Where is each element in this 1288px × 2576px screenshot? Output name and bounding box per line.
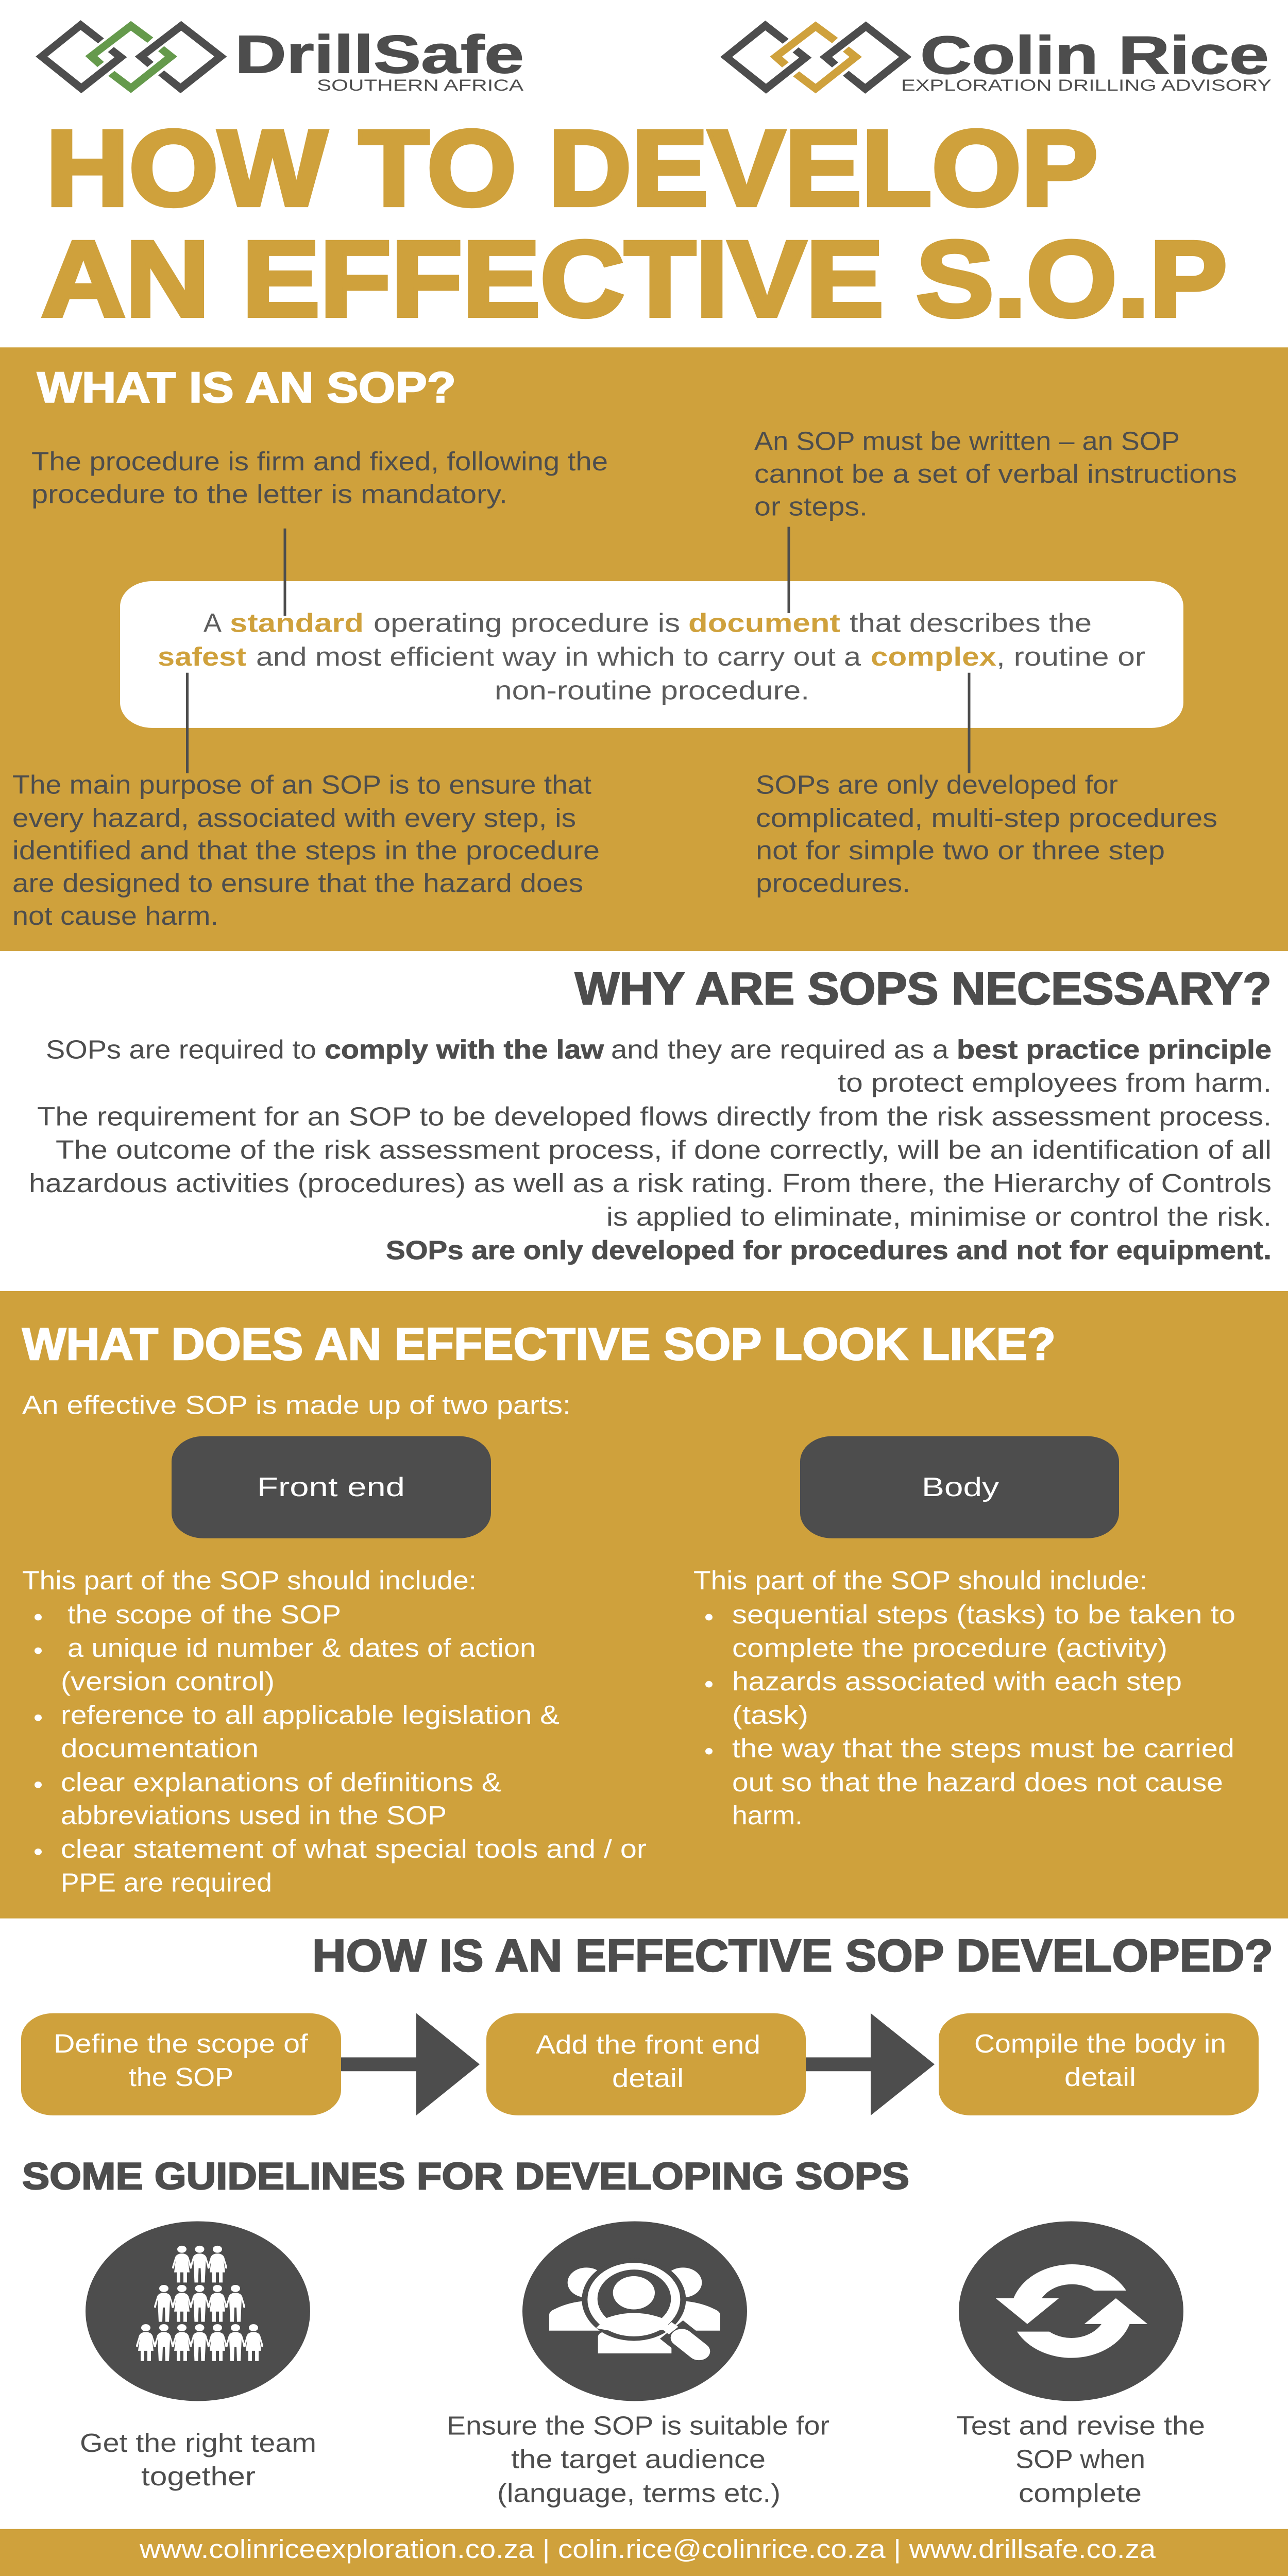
definition box: , routine or [996,642,1145,672]
caption: right team: Get the right team [80,2429,316,2458]
logo: Colin Rice Exploration Drilling Advisory [720,21,1272,94]
icon: DrillSafe interlocking diamonds [36,20,227,93]
definition box: document [688,609,840,638]
step: define scope: Define the scope of [54,2029,309,2058]
caption: test and revise: SOP when [1015,2445,1145,2474]
caption: right team: together [141,2462,256,2491]
box: front end [172,1436,491,1538]
box: front end: Front end [257,1472,405,1502]
caption: right team [80,2429,316,2491]
list: front end contents: PPE are required [61,1868,272,1897]
text: firm and fixed [31,447,608,509]
list: front end contents: abbreviations used in the SOP [61,1801,447,1831]
definition box: complex [871,642,996,672]
list: front end contents: clear statement of what special tools and / or [61,1835,647,1864]
list: body contents: harm. [732,1801,803,1831]
icon: team pyramid [86,2221,310,2401]
body text [29,1036,1272,1265]
list: body contents: (task) [732,1701,808,1730]
caption: suitable for audience [447,2412,829,2508]
panel background [0,347,1288,951]
caption: test and revise: complete [1019,2479,1142,2508]
list: front end contents: (version control) [61,1667,275,1696]
box: body: Body [922,1472,999,1502]
footer: www.colinriceexploration.co.za | colin.rice@colinrice.co.za | www.drillsafe.co.za [139,2535,1156,2564]
box: body [800,1436,1119,1538]
heading: WHAT DOES AN EFFECTIVE SOP LOOK LIKE? [22,1319,1056,1370]
list: front end contents [22,1566,647,1897]
step: compile body: Compile the body in [974,2029,1226,2058]
footer [0,2529,1288,2576]
icon: Colin Rice interlocking diamonds [720,21,911,94]
step: add front end: detail [612,2064,684,2093]
caption: suitable for audience: (language, terms etc.) [497,2479,781,2508]
definition box: and most efficient way in which to carry out a [256,642,861,672]
panel: what does an effective SOP look like [0,1291,1288,1919]
text: must be written: or steps. [754,492,868,521]
definition box: A [204,609,222,638]
panel: how is an effective SOP developed [21,1930,1273,2115]
text: main purpose: The main purpose of an SOP is to ensure that [12,771,591,800]
intro text: An effective SOP is made up of two parts: [22,1391,571,1420]
list: body contents: complete the procedure (activity) [732,1634,1167,1663]
heading: SOME GUIDELINES FOR DEVELOPING SOPS [22,2155,909,2197]
list: body contents: This part of the SOP should include: [693,1566,1147,1595]
list: front end contents: This part of the SOP should include: [22,1566,477,1595]
DrillSafe tagline: SOUTHERN AFRICA [317,76,523,94]
list: body contents [693,1566,1235,1831]
text: only for complicated procedures: not for simple two or three step [756,836,1165,866]
caption: suitable for audience: the target audience [511,2445,766,2474]
list: body contents: out so that the hazard does not cause [732,1768,1223,1797]
text: main purpose [12,771,600,931]
caption: test and revise [956,2412,1205,2508]
list: front end contents: reference to all applicable legislation & [61,1701,560,1730]
panel: what is an SOP [0,347,1288,951]
text: firm and fixed: The procedure is firm and fixed, following the [31,447,608,476]
connector lines [188,527,969,773]
icon: revise cycle arrows [959,2221,1183,2401]
definition box: standard [230,609,364,638]
step: define scope [21,2013,341,2115]
panel: why are SOPs necessary [29,963,1272,1265]
arrow: step 1 to step 2 [341,2013,480,2115]
definition box: operating procedure is [374,609,680,638]
definition box [120,581,1183,728]
text: only for complicated procedures: procedures. [756,869,910,898]
list: body contents: the way that the steps must be carried [732,1734,1234,1763]
Colin Rice tagline: EXPLORATION DRILLING ADVISORY [901,76,1272,94]
text: only for complicated procedures [756,771,1217,898]
caption: suitable for audience: Ensure the SOP is suitable for [447,2412,829,2441]
body text: comply with the law [325,1036,604,1064]
body text: and they are required as a [611,1036,949,1064]
icon: people under magnifying glass [522,2221,747,2401]
logo: DrillSafe Southern Africa [36,20,524,94]
Colin Rice wordmark: Colin Rice [920,26,1269,86]
text: must be written [754,427,1237,521]
text: main purpose: identified and that the steps in the procedure [12,836,600,866]
text: firm and fixed: procedure to the letter is mandatory. [31,480,507,509]
panel background [0,1291,1288,1919]
definition box: that describes the [850,609,1092,638]
list: front end contents: a unique id number & dates of action [67,1634,536,1663]
list: front end contents: the scope of the SOP [67,1600,341,1629]
definition box: non-routine procedure. [495,676,809,705]
definition box: safest [158,642,246,672]
text: only for complicated procedures: SOPs are only developed for [756,771,1118,800]
text: main purpose: not cause harm. [12,902,218,931]
title [41,108,1227,339]
text: main purpose: every hazard, associated with every step, is [12,804,576,833]
list: body contents: hazards associated with each step [732,1667,1182,1696]
title: HOW TO DEVELOP [46,108,1098,228]
body text: SOPs are required to [46,1036,316,1064]
arrow: step 2 to step 3 [806,2013,935,2115]
step: add front end [486,2013,806,2115]
text: main purpose: are designed to ensure that the hazard does [12,869,583,898]
step: compile body: detail [1064,2063,1136,2092]
step: compile body [939,2013,1259,2115]
text: must be written: cannot be a set of verbal instructions [754,460,1237,488]
caption: test and revise: Test and revise the [956,2412,1205,2441]
list: front end contents: clear explanations of definitions & [61,1768,501,1797]
DrillSafe wordmark: DrillSafe [235,25,524,84]
step: add front end: Add the front end [536,2030,760,2060]
text: only for complicated procedures: complicated, multi-step procedures [756,804,1217,833]
panel: guidelines [22,2155,1205,2508]
step: define scope: the SOP [129,2063,233,2092]
heading: WHAT IS AN SOP? [37,364,456,412]
list: front end contents: documentation [61,1734,259,1763]
list: body contents: sequential steps (tasks) to be taken to [732,1600,1235,1629]
text: must be written: An SOP must be written – an SOP [754,427,1180,456]
